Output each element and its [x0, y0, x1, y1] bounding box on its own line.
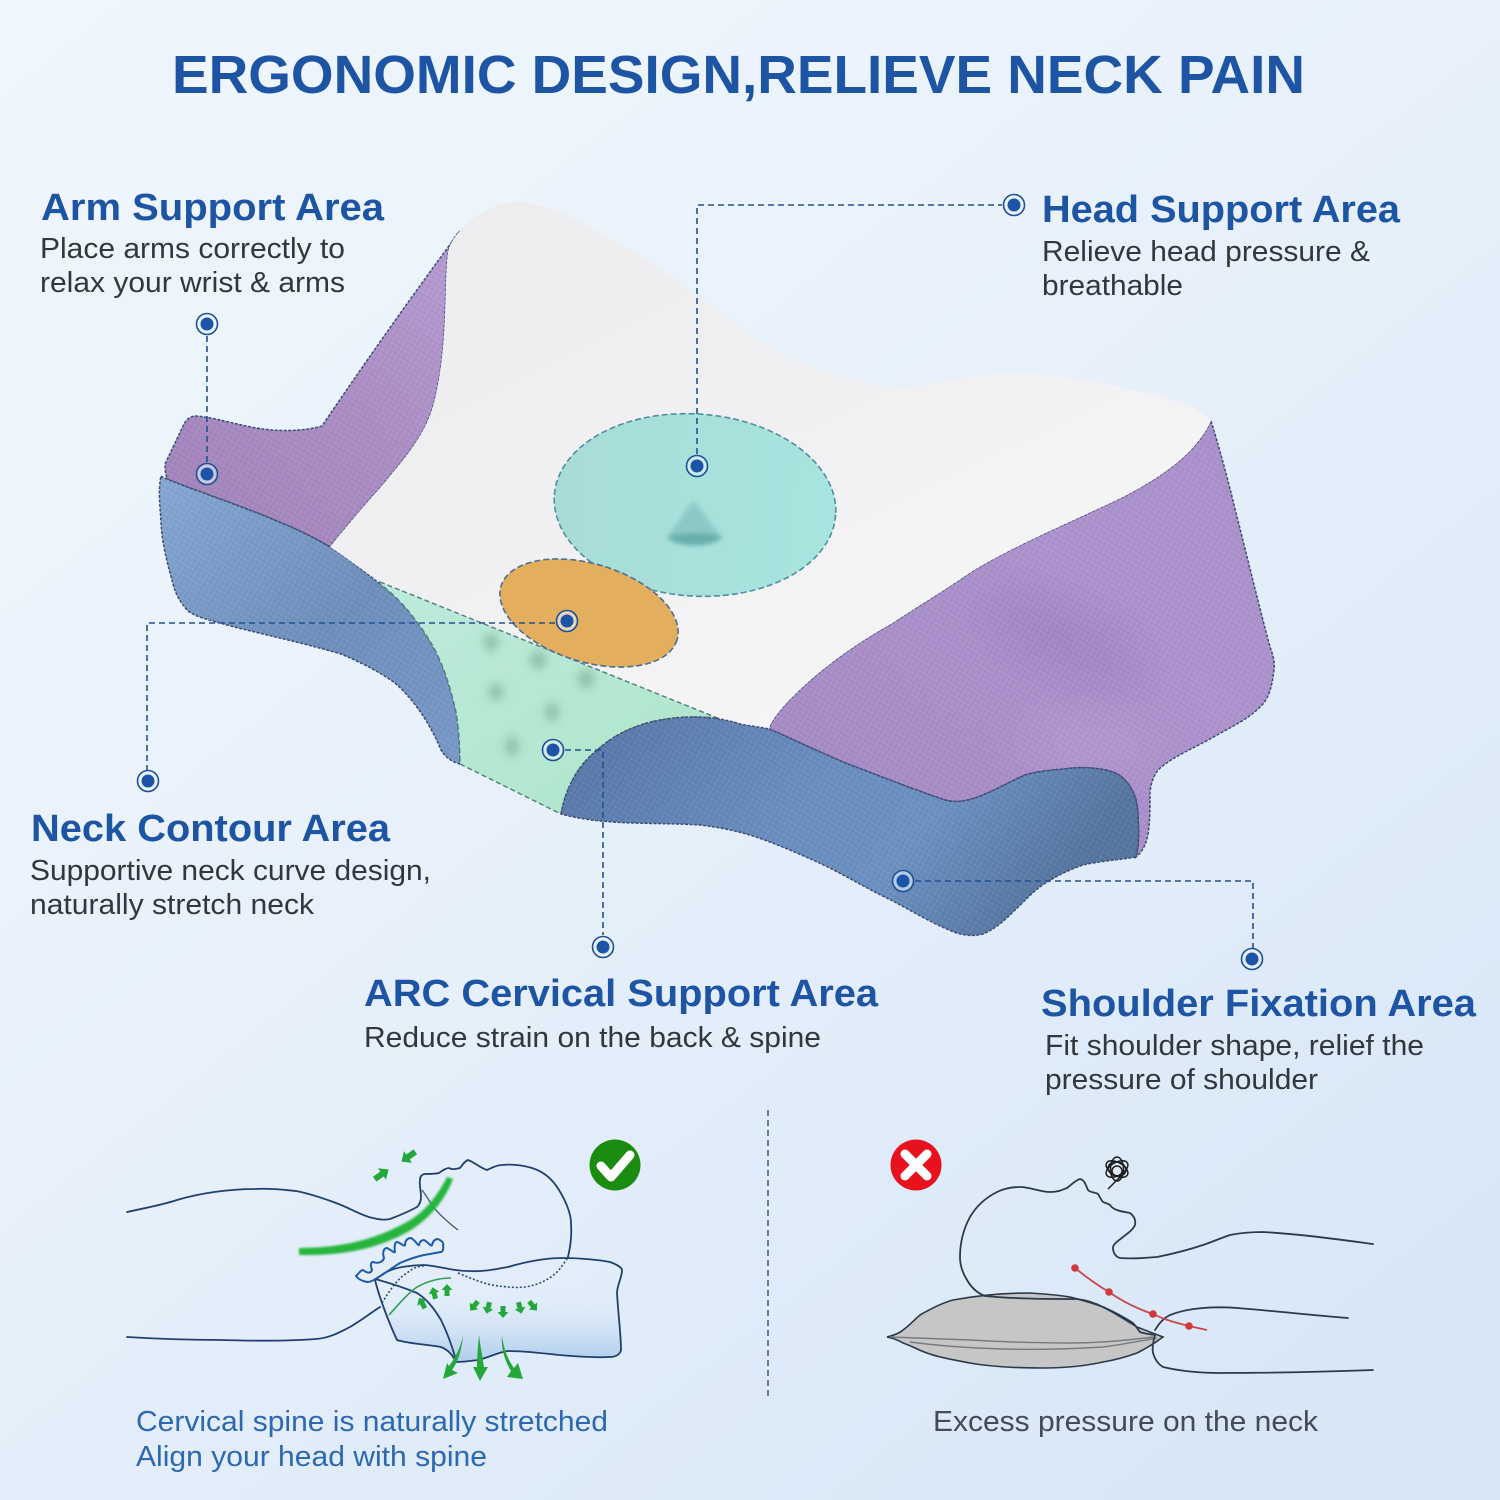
inner green curve — [389, 1278, 451, 1315]
leader markers — [138, 194, 1262, 970]
red misaligned spine — [1071, 1264, 1207, 1330]
label: shoulder fixation area: Fit shoulder shape, relief the — [1045, 1030, 1424, 1062]
dimple in head support zone — [667, 501, 722, 546]
label: arm support area: relax your wrist & arms — [40, 267, 345, 299]
caption: correct posture — [136, 1406, 608, 1473]
label: shoulder fixation area: pressure of shoulder — [1045, 1064, 1318, 1096]
icon: red cross — [890, 1140, 942, 1190]
label: arm support area — [40, 187, 385, 299]
caption: correct posture: Cervical spine is naturally stretched — [136, 1406, 608, 1438]
caption: correct posture: Align your head with spine — [136, 1441, 487, 1473]
pillow seam lines — [890, 1337, 1157, 1349]
center divider — [767, 1110, 769, 1398]
shoulder curve — [375, 1279, 456, 1360]
diagram: wrong sleeping posture — [887, 1157, 1373, 1373]
body and head outline — [127, 1160, 571, 1257]
label: shoulder fixation area: Shoulder Fixation Area — [1041, 983, 1477, 1025]
label: arm support area: Arm Support Area — [41, 187, 385, 229]
green pressure arrows — [371, 1146, 541, 1381]
diagram: correct sleeping posture — [127, 1146, 622, 1381]
pillow: left arm purple panel — [165, 231, 460, 547]
pillow: right purple panel — [769, 421, 1274, 857]
head and chest outline — [960, 1179, 1373, 1335]
title: ERGONOMIC DESIGN,RELIEVE NECK PAIN — [172, 45, 1305, 105]
label: shoulder fixation area — [1041, 983, 1477, 1096]
pillow: mint cervical support panel — [380, 582, 720, 814]
flat grey pillow — [887, 1293, 1163, 1368]
label: neck contour area — [30, 808, 431, 921]
highlight: head support zone — [548, 404, 842, 606]
highlight: neck contour zone — [487, 539, 691, 687]
pillow outline — [375, 1258, 622, 1362]
green spine arc — [299, 1177, 453, 1255]
label: neck contour area: Neck Contour Area — [31, 808, 391, 850]
back outline — [127, 1307, 380, 1341]
pillow: left blue side — [159, 476, 460, 764]
contour pillow fill — [375, 1258, 622, 1362]
label: neck contour area: naturally stretch neck — [30, 889, 315, 921]
lower back outline — [1153, 1335, 1373, 1373]
label: ARC cervical support area — [364, 973, 879, 1054]
icon: stress scribble — [1103, 1157, 1131, 1189]
label: arm support area: Place arms correctly to — [40, 233, 345, 265]
pillow: front blue shoulder side — [561, 717, 1139, 935]
label: ARC cervical support area: ARC Cervical Support Area — [364, 973, 879, 1015]
label: head support area: breathable — [1042, 270, 1183, 302]
label: neck contour area: Supportive neck curve design, — [30, 855, 431, 887]
label: head support area — [1042, 189, 1401, 302]
label: ARC cervical support area: Reduce strain on the back & spine — [364, 1022, 821, 1054]
label: head support area: Head Support Area — [1042, 189, 1401, 231]
pillow: white memory foam top — [330, 202, 1211, 729]
leader lines — [147, 205, 1253, 948]
label: head support area: Relieve head pressure & — [1042, 236, 1370, 268]
caption: wrong posture: Excess pressure on the neck — [933, 1406, 1319, 1438]
neck curve — [422, 1190, 458, 1230]
icon: green check — [590, 1140, 640, 1190]
head dotted outline — [382, 1257, 568, 1303]
arm outline — [1155, 1307, 1348, 1330]
vertebrae — [356, 1238, 443, 1282]
pillow illustration — [159, 202, 1274, 935]
